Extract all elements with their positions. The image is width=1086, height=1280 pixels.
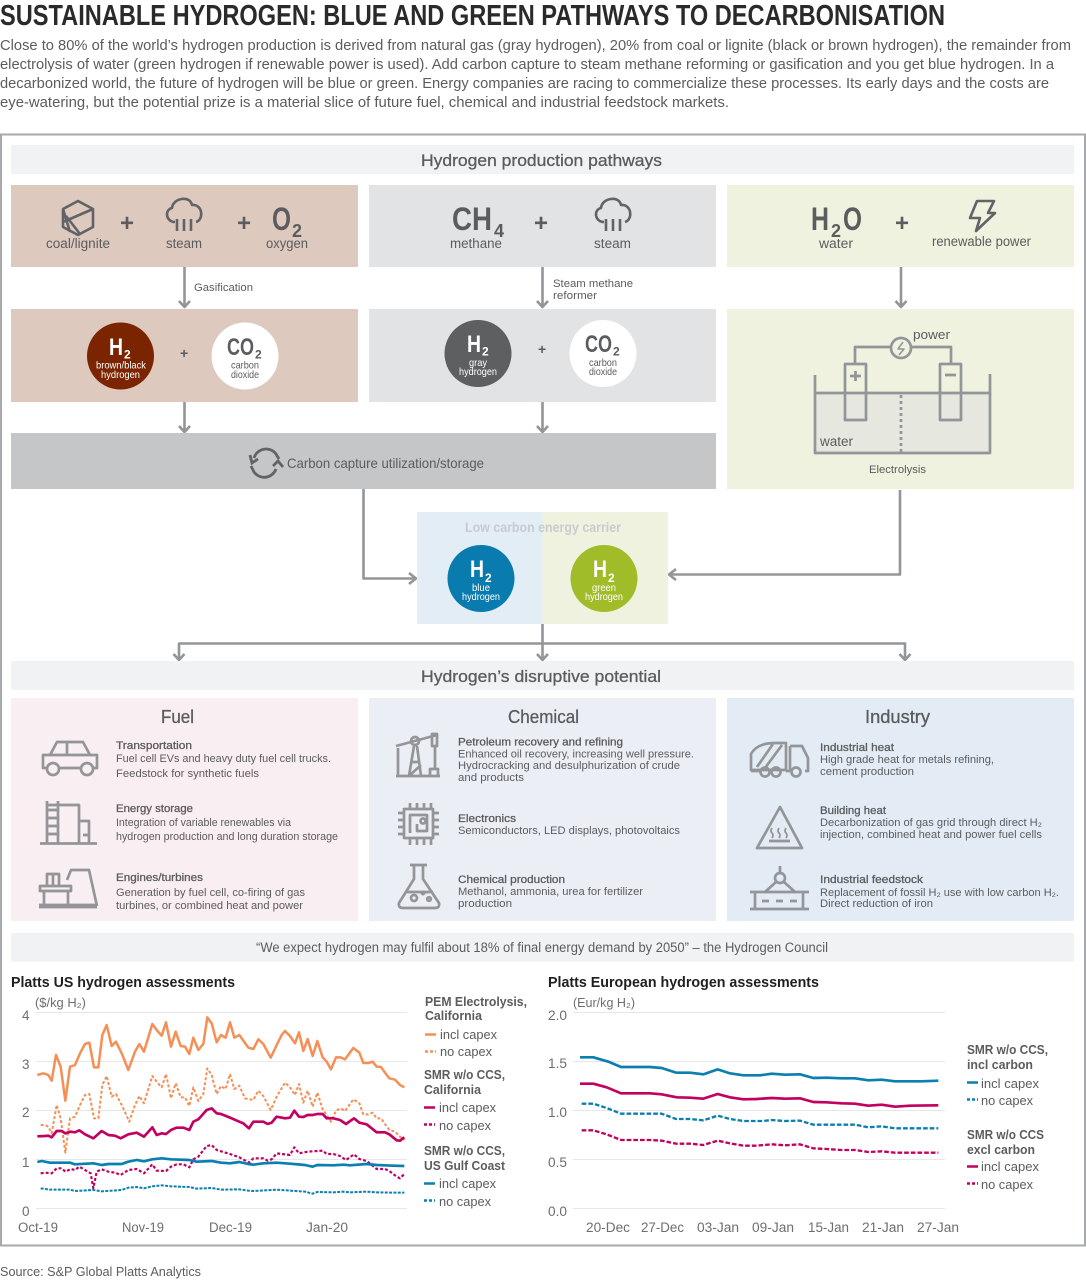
heading: production pathways: Hydrogen production pathways (421, 151, 662, 170)
text: petroleum: and products (458, 772, 525, 784)
circle: green hydrogen (570, 545, 638, 612)
intro paragraph (0, 38, 1071, 111)
gridlines and axis: 1 (22, 1155, 30, 1170)
plus: + (538, 341, 546, 357)
formula: O2: O (272, 201, 291, 237)
arrow: electrolysis to green hydrogen (669, 490, 900, 580)
gridlines and axis: Jan-20 (306, 1220, 348, 1235)
circle: blue hydrogen: 2 (485, 571, 492, 585)
circle: gray hydrogen: 2 (482, 344, 489, 358)
legend: US: no capex (439, 1119, 492, 1133)
label: steam: steam (166, 236, 202, 251)
chart title: Platts US hydrogen assessments (11, 974, 235, 991)
gridlines and axis: 27-Dec (641, 1220, 684, 1235)
intro paragraph: Close to 80% of the world’s hydrogen production is derived from natural gas (gray hydrogen), 20% from coal or lignite (black or brown hydrogen), the remainder from (0, 38, 1071, 54)
formula O: O (843, 201, 862, 237)
arrow: brown to capture (179, 402, 190, 432)
gridlines and axis: 1.0 (548, 1105, 567, 1120)
panel: electrolysis (727, 309, 1074, 489)
legend: US: incl capex (439, 1177, 497, 1191)
gridlines and axis: 3 (22, 1057, 30, 1072)
icon: cycle arrows (250, 449, 283, 477)
data lines (37, 1017, 404, 1194)
text: transportation: Fuel cell EVs and heavy duty fuel cell trucks. (116, 753, 331, 765)
icon: cement truck (751, 743, 808, 776)
legend: Europe: no capex (981, 1094, 1034, 1108)
label: steam methane reformer (553, 278, 633, 302)
text: chemical production (458, 874, 643, 910)
chart: European assessments (548, 974, 1048, 1235)
label: steam methane reformer: Steam methane (553, 278, 633, 290)
text: engines (116, 872, 305, 912)
circle: carbon dioxide: 2 (255, 348, 262, 362)
text: energy storage: Energy storage (116, 803, 193, 815)
circle: carbon dioxide (570, 320, 636, 387)
text: industrial heat: Industrial heat (820, 742, 894, 754)
label: water: water (819, 434, 854, 449)
icon: car (43, 742, 97, 775)
circle: carbon dioxide (212, 322, 278, 390)
gridlines and axis: 2.0 (548, 1008, 567, 1023)
circle: blue hydrogen: H (470, 556, 484, 583)
gridlines and axis: 21-Jan (862, 1220, 904, 1235)
formula subscript: 4 (494, 221, 504, 241)
icon: steam cloud (596, 199, 630, 231)
gridlines and axis: Oct-19 (18, 1220, 58, 1235)
label: carbon capture: Carbon capture utilization/storage (287, 455, 484, 471)
plus: + (237, 210, 251, 237)
formula: H2O: H (811, 201, 829, 237)
formula: CH4: CH (452, 201, 492, 237)
text: engines: Generation by fuel cell, co-firing of gas (116, 887, 305, 899)
text: feedstock: Replacement of fossil H₂ use with low carbon H₂. (820, 887, 1059, 899)
label: steam: steam (594, 236, 631, 251)
arrow: water to electrolysis (896, 267, 906, 307)
intro paragraph: decarbonized world, the future of hydrogen will be blue or green. Energy companies are racing to commercialize these processes. Its early days and the costs are (0, 76, 1049, 92)
arrows: carrier to applications (174, 624, 910, 660)
legend: US: incl capex (439, 1101, 497, 1115)
panel: carbon capture (11, 433, 716, 489)
panel: fuel (11, 698, 358, 921)
circle: carbon dioxide: dioxide (231, 369, 259, 381)
legend: US (424, 995, 527, 1209)
text: engines: Engines/turbines (116, 872, 204, 884)
arrow: steam methane reformer (537, 267, 548, 307)
text: electronics: Semiconductors, LED displays, photovoltaics (458, 825, 681, 837)
text: industrial heat (820, 742, 994, 778)
circle: brown hydrogen: H (109, 334, 123, 361)
icon: oil pump (396, 734, 440, 776)
panel: gray hydrogen output (369, 309, 716, 402)
circle: carbon dioxide: CO (585, 331, 612, 358)
text: building heat (820, 805, 1042, 841)
circle: gray hydrogen: gray (469, 357, 488, 369)
legend: Europe (967, 1043, 1048, 1192)
circle: brown hydrogen: hydrogen (101, 369, 140, 381)
text: petroleum (458, 736, 694, 784)
text: industrial heat: High grade heat for metals refining, (820, 754, 994, 766)
text: petroleum: Petroleum recovery and refining (458, 736, 623, 748)
label: electrolysis: Electrolysis (869, 464, 927, 476)
arrow: gray to capture (537, 402, 548, 432)
circle: carbon dioxide: carbon (589, 357, 617, 369)
text: energy storage (116, 803, 338, 843)
text: electronics: Electronics (458, 813, 517, 825)
circle: carbon dioxide: carbon (231, 360, 259, 372)
legend: US: PEM Electrolysis, (425, 995, 527, 1009)
icon: heat warning (757, 807, 802, 848)
icon: flask (399, 865, 439, 908)
circle: blue hydrogen: blue (472, 582, 490, 594)
plus: + (534, 210, 548, 237)
text: transportation: Feedstock for synthetic fuels (116, 768, 260, 780)
plus: + (180, 345, 188, 361)
text: transportation (116, 740, 331, 780)
source note: Source: S&P Global Platts Analytics (0, 1264, 201, 1279)
icon: chip (398, 803, 439, 845)
label: low carbon: Low carbon energy carrier (465, 520, 622, 535)
gridlines and axis: Dec-19 (209, 1220, 252, 1235)
plus: + (120, 210, 134, 237)
heading: production pathways (11, 145, 1074, 174)
circle: green hydrogen: hydrogen (585, 591, 623, 603)
panel: brown hydrogen output (11, 309, 358, 402)
text: building heat: Decarbonization of gas grid through direct H₂ (820, 817, 1042, 829)
gridlines and axis: 03-Jan (697, 1220, 739, 1235)
text: chemical production: Methanol, ammonia, urea for fertilizer (458, 886, 643, 898)
legend: US: California (425, 1009, 483, 1023)
legend: US: no capex (440, 1045, 493, 1059)
panel: chemical (369, 698, 716, 921)
label: renewable power: renewable power (932, 234, 1031, 249)
legend: Europe: incl carbon (967, 1058, 1033, 1072)
gridlines and axis: 0.5 (548, 1155, 567, 1170)
circle: brown hydrogen: 2 (124, 348, 131, 362)
text: engines: turbines, or combined heat and power (116, 900, 303, 912)
chart: US assessments (11, 974, 527, 1235)
gridlines and axis: 27-Jan (917, 1220, 959, 1235)
circle: blue hydrogen: hydrogen (462, 591, 500, 603)
circle: brown hydrogen (87, 322, 154, 390)
gridlines and axis (18, 1008, 407, 1235)
text: electronics (458, 813, 681, 837)
data lines (580, 1057, 938, 1153)
icon: power plant (39, 870, 97, 907)
circle: carbon dioxide: CO (227, 334, 254, 361)
label: water: water (818, 236, 854, 251)
circle: carbon dioxide: dioxide (589, 366, 617, 378)
water fill (815, 393, 990, 453)
label: oxygen: oxygen (266, 236, 308, 251)
legend: US: incl capex (440, 1028, 498, 1042)
legend: Europe: excl carbon (967, 1143, 1035, 1157)
label: methane: methane (450, 236, 502, 251)
formula subscript: 2 (831, 221, 841, 241)
legend: Europe: incl capex (981, 1077, 1040, 1091)
circle: brown hydrogen: brown/black (96, 360, 147, 372)
quote bar: “We expect hydrogen may fulfil about 18% of final energy demand by 2050” – the Hydrogen Council (256, 940, 828, 955)
panel: low carbon energy carrier (417, 512, 668, 624)
panel: water inputs (727, 185, 1074, 267)
label: steam methane reformer: reformer (553, 290, 597, 302)
arrow: capture to blue hydrogen (364, 489, 416, 584)
label: gasification: Gasification (194, 282, 253, 294)
gridlines and axis: Nov-19 (122, 1220, 164, 1235)
gridlines and axis: 20-Dec (586, 1220, 630, 1235)
text: feedstock: Industrial feedstock (820, 874, 924, 886)
quote bar (11, 933, 1074, 962)
intro paragraph: eye-watering, but the potential prize is a material slice of future fuel, chemical and industrial feedstock markets. (0, 95, 729, 111)
legend: US: US Gulf Coast (424, 1159, 506, 1173)
text: chemical production: Chemical production (458, 874, 565, 886)
legend: Europe: SMR w/o CCS (967, 1128, 1044, 1142)
legend: US: SMR w/o CCS, (424, 1144, 505, 1158)
arrow: gasification (179, 267, 190, 307)
text: petroleum: Hydrocracking and desulphurization of crude (458, 760, 680, 772)
text: industrial heat: cement production (820, 766, 914, 778)
panel: methane inputs (369, 185, 716, 267)
panel: coal inputs (11, 185, 358, 267)
unit: (Eur/kg H₂) (573, 996, 635, 1010)
circle: gray hydrogen (444, 320, 512, 387)
unit: ($/kg H₂) (35, 996, 86, 1010)
text: energy storage: Integration of variable renewables via (116, 817, 292, 829)
gridlines and axis: 0.0 (548, 1204, 567, 1219)
gridlines and axis: 09-Jan (752, 1220, 794, 1235)
circle: gray hydrogen: H (467, 331, 481, 358)
text: petroleum: Enhanced oil recovery, increasing well pressure. (458, 748, 694, 760)
icon: lightning (970, 201, 995, 231)
label: coal: coal/lignite (46, 236, 110, 251)
text: energy storage: hydrogen production and long duration storage (116, 831, 338, 843)
heading: disruptive potential: Hydrogen’s disruptive potential (421, 667, 661, 686)
legend: Europe: no capex (981, 1178, 1034, 1192)
legend: Europe: incl capex (981, 1160, 1040, 1174)
diagram: electrolysis cell (815, 338, 990, 453)
icon: energy storage (40, 801, 97, 844)
legend: US: SMR w/o CCS, (424, 1068, 505, 1082)
circle: green hydrogen: H (593, 556, 607, 583)
heading: chemical: Chemical (508, 707, 579, 727)
text: feedstock (820, 874, 1059, 910)
chart title: Platts European hydrogen assessments (548, 974, 819, 991)
gridlines and axis (548, 1008, 959, 1235)
legend: Europe: SMR w/o CCS, (967, 1043, 1048, 1057)
icon: feedstock load (750, 866, 809, 909)
icon: steam cloud (167, 199, 201, 231)
circle: green hydrogen: green (592, 582, 616, 594)
circle: carbon dioxide: 2 (613, 344, 620, 358)
heading: fuel: Fuel (161, 707, 194, 727)
formula subscript: 2 (292, 221, 302, 241)
legend: US: California (424, 1083, 482, 1097)
gridlines and axis: 4 (22, 1008, 30, 1023)
text: building heat: injection, combined heat and power fuel cells (820, 829, 1042, 841)
circle: blue hydrogen (448, 545, 514, 612)
circle: green hydrogen: 2 (608, 571, 615, 585)
circle: gray hydrogen: hydrogen (459, 366, 497, 378)
text: transportation: Transportation (116, 740, 192, 752)
gridlines and axis: 2 (22, 1105, 30, 1120)
legend: US: no capex (439, 1195, 492, 1209)
plus: + (895, 210, 909, 237)
heading: industry: Industry (865, 707, 930, 727)
gridlines and axis: 1.5 (548, 1056, 567, 1071)
gridlines and axis: 15-Jan (808, 1220, 849, 1235)
text: building heat: Building heat (820, 805, 886, 817)
heading: disruptive potential (11, 661, 1074, 690)
intro paragraph: electrolysis of water (green hydrogen if renewable power is used). Add carbon capture to steam methane reforming or gasification and you get blue hydrogen. In a (0, 57, 1055, 73)
gridlines and axis: 0 (22, 1204, 30, 1219)
text: feedstock: Direct reduction of iron (820, 898, 933, 910)
label: power: power (913, 327, 951, 342)
panel: industry (727, 698, 1074, 921)
text: chemical production: production (458, 898, 512, 910)
icon: coal (63, 201, 93, 235)
